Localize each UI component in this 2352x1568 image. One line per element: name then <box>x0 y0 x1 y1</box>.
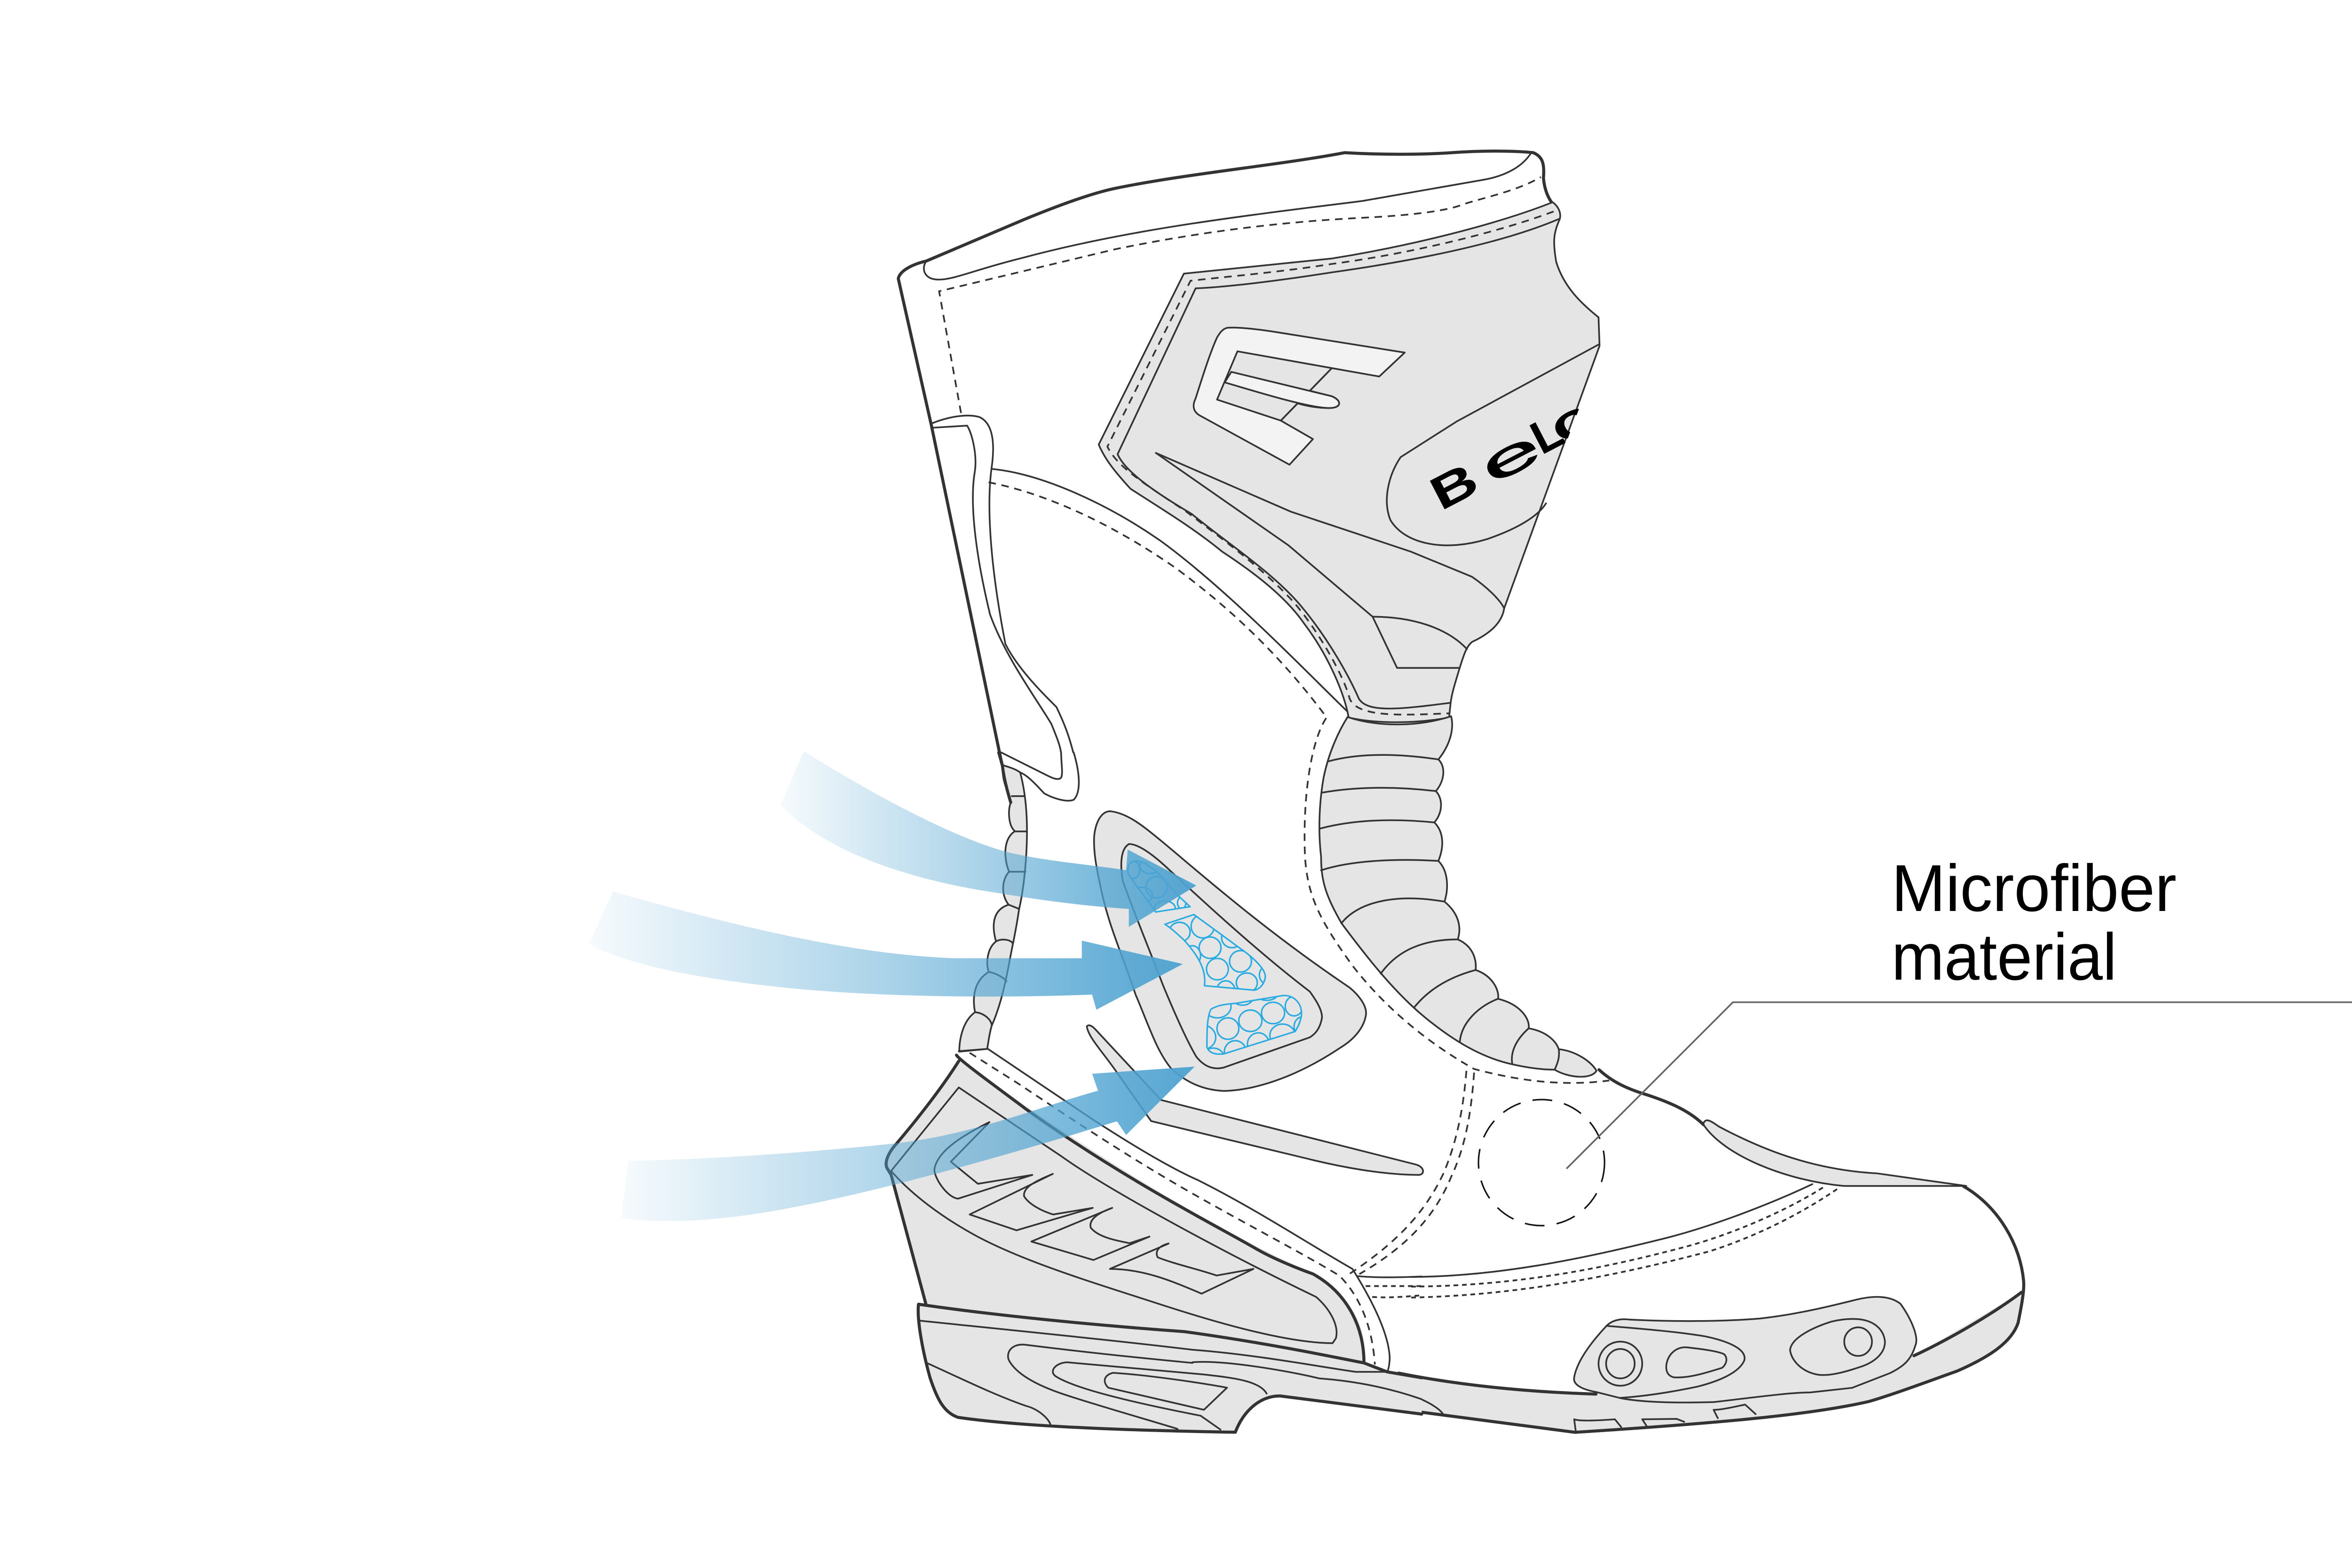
shin emblem <box>1194 328 1405 465</box>
calf panel stitching <box>989 483 1327 718</box>
ankle accordion and foot upper <box>1304 716 1966 1274</box>
calf panel seam <box>992 469 1347 711</box>
boot illustration <box>589 150 2352 1434</box>
binding band <box>959 1049 1390 1372</box>
heel counter panel <box>886 1060 1365 1363</box>
heel sole outline <box>918 1304 1422 1432</box>
rib separators <box>975 796 1026 1025</box>
rear calf accordion ribs <box>959 752 1079 1052</box>
callout label: material <box>1891 919 2117 994</box>
heel sole <box>918 1304 1422 1432</box>
counter outline <box>886 1061 959 1304</box>
counter inner panel <box>891 1087 1336 1343</box>
shaft collar band <box>924 153 1531 280</box>
counter vent graphics <box>934 1122 1254 1294</box>
panel outer shape <box>1094 811 1366 1091</box>
vamp stitching start <box>1366 1286 1422 1298</box>
vamp double stitching <box>1349 1071 1474 1274</box>
brand logo text: L <box>1522 404 1571 464</box>
toe top grey strip <box>1704 1120 1966 1186</box>
brand logo text: e <box>1471 418 1550 495</box>
mesh cell top <box>1127 858 1190 917</box>
toe slider cap <box>1574 1297 1916 1402</box>
shin guard stitching <box>1107 212 1554 714</box>
toe double stitching <box>1411 1186 1840 1298</box>
shin guard contour lines <box>1156 453 1504 668</box>
sole contour lines <box>920 1321 1422 1430</box>
microfiber area dashed circle <box>1478 1100 1605 1226</box>
slider fasteners <box>1598 1319 1885 1386</box>
brand logo text <box>1430 409 1579 509</box>
sole treads <box>1574 1405 1756 1432</box>
front sole fill <box>1398 1292 2022 1433</box>
shin guard inner edge <box>1118 219 1559 709</box>
ankle accordion ribs <box>1319 716 1597 1077</box>
accordion separators <box>1320 755 1559 1069</box>
counter top heavy edge <box>956 1055 1364 1363</box>
vamp seam start <box>1358 1276 1422 1277</box>
sole top edge <box>1398 1292 2021 1394</box>
mesh cell middle <box>1165 915 1274 1002</box>
panel inner edge <box>1121 844 1322 1069</box>
arrow: upper airflow <box>780 751 1196 927</box>
slider inner curve <box>1606 1326 1745 1398</box>
strap loop end <box>1001 752 1079 800</box>
strap loop <box>931 416 1073 752</box>
heel pocket <box>1105 1373 1227 1410</box>
grey shin guard panel <box>1099 202 1599 722</box>
arrow: lower airflow <box>621 1067 1195 1221</box>
ankle stitching <box>1304 718 1609 1083</box>
brand logo text: B <box>1422 453 1486 520</box>
toe outline <box>1398 1186 2024 1433</box>
arrow: middle airflow <box>589 892 1183 1010</box>
sole groove <box>1411 1395 1444 1416</box>
heel counter and heel sole <box>886 1025 1423 1432</box>
rib strip <box>959 765 1027 1052</box>
rear edge heavy line <box>999 752 1011 802</box>
binding stitching <box>969 1053 1375 1365</box>
collar stitching <box>939 177 1541 413</box>
long side fin <box>1087 1025 1423 1175</box>
logo badge outline <box>1387 345 1598 546</box>
shaft outer outline <box>898 151 1554 764</box>
ventilation panel <box>1094 811 1366 1091</box>
toe box and front sole <box>1398 1184 2024 1433</box>
brand logo text: o <box>1541 388 1602 453</box>
toe seam <box>1411 1184 1812 1277</box>
boot shaft <box>898 151 1599 764</box>
mesh cell bottom <box>1190 988 1311 1066</box>
instep line <box>1599 1069 1704 1125</box>
callout label: Microfiber <box>1891 851 2177 925</box>
leader line <box>1566 1002 2352 1169</box>
callout label <box>1891 851 2177 994</box>
airflow arrows <box>589 751 1196 1221</box>
